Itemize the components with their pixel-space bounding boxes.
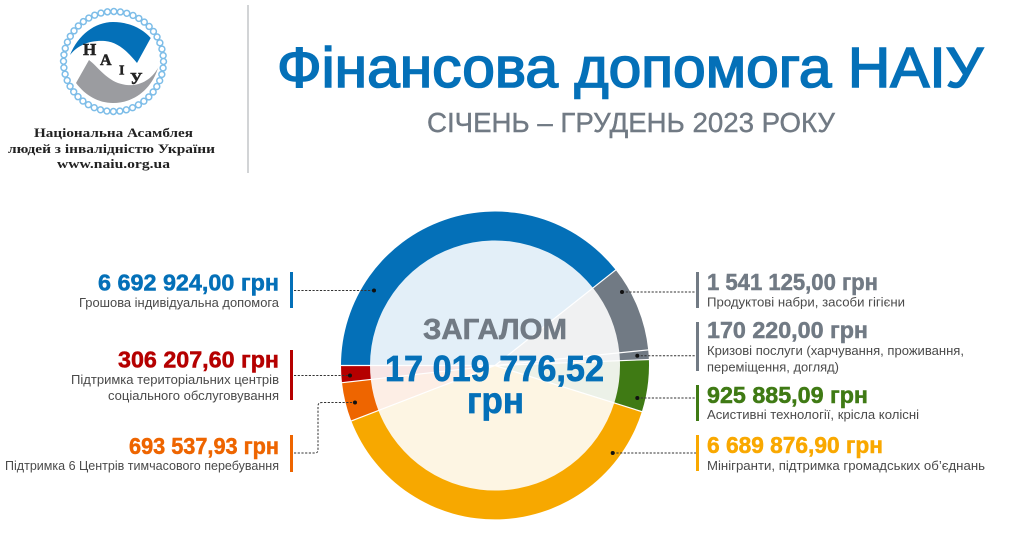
total label: ЗАГАЛОМ (423, 314, 567, 346)
callout: food kits: 1 541 125,00 грн (707, 269, 878, 295)
callout: food kits (620, 269, 905, 310)
callout: assistive technologies: Асистивні технології, крісла колісні (707, 408, 919, 422)
callout: crisis services: Кризові послуги (харчування, проживання, (707, 344, 964, 358)
logo letters: І (119, 64, 124, 78)
organisation name: Національна Асамблея (34, 125, 193, 140)
pale inner wedges (370, 240, 620, 491)
callout: territorial centres (71, 346, 352, 403)
callout: crisis services: переміщення, догляд) (707, 360, 839, 374)
callout: territorial centres: Підтримка територіальних центрів (71, 373, 279, 387)
callout: temporary stay centres: 693 537,93 грн (129, 433, 279, 459)
callout: territorial centres: соціального обслуговування (108, 389, 279, 403)
logo: NAIU emblem and name (8, 12, 216, 171)
organisation name: людей з інвалідністю України (8, 141, 216, 156)
callout: crisis services (635, 317, 964, 374)
icon: grey wave (76, 60, 158, 103)
callout: assistive technologies: 925 885,09 грн (707, 382, 868, 408)
logo letters: А (100, 52, 112, 69)
ring segments (341, 212, 649, 519)
callout: temporary stay centres (5, 400, 357, 473)
logo letters: Н (83, 40, 96, 59)
callout: territorial centres: 306 207,60 грн (118, 346, 279, 372)
callout: assistive technologies (635, 382, 919, 422)
icon: blue wave (70, 22, 151, 63)
donut chart (340, 212, 650, 519)
logo letters: У (130, 69, 143, 88)
callout: cash assistance: Грошова індивідуальна допомога (79, 296, 279, 310)
callout: food kits: Продуктові набри, засоби гігієни (707, 296, 905, 310)
callout: minigrants: Мінігранти, підтримка громадських об’єднань (707, 459, 985, 473)
callout: cash assistance (79, 270, 376, 310)
total value: 17 019 776,52 (385, 348, 604, 389)
callout: minigrants (611, 432, 985, 473)
title: Фінансова допомога НАІУ (277, 36, 984, 100)
callout: crisis services: 170 220,00 грн (707, 317, 868, 343)
callout: temporary stay centres: Підтримка 6 Центрів тимчасового перебування (5, 459, 279, 473)
subtitle: СІЧЕНЬ – ГРУДЕНЬ 2023 РОКУ (427, 107, 835, 138)
organisation name (8, 125, 216, 171)
total currency: грн (467, 380, 524, 421)
callout: minigrants: 6 689 876,90 грн (707, 432, 883, 458)
callout: cash assistance: 6 692 924,00 грн (98, 270, 279, 296)
logo letters (83, 40, 143, 88)
icon: ring of beads (64, 12, 164, 112)
organisation name: www.naiu.org.ua (57, 156, 171, 171)
